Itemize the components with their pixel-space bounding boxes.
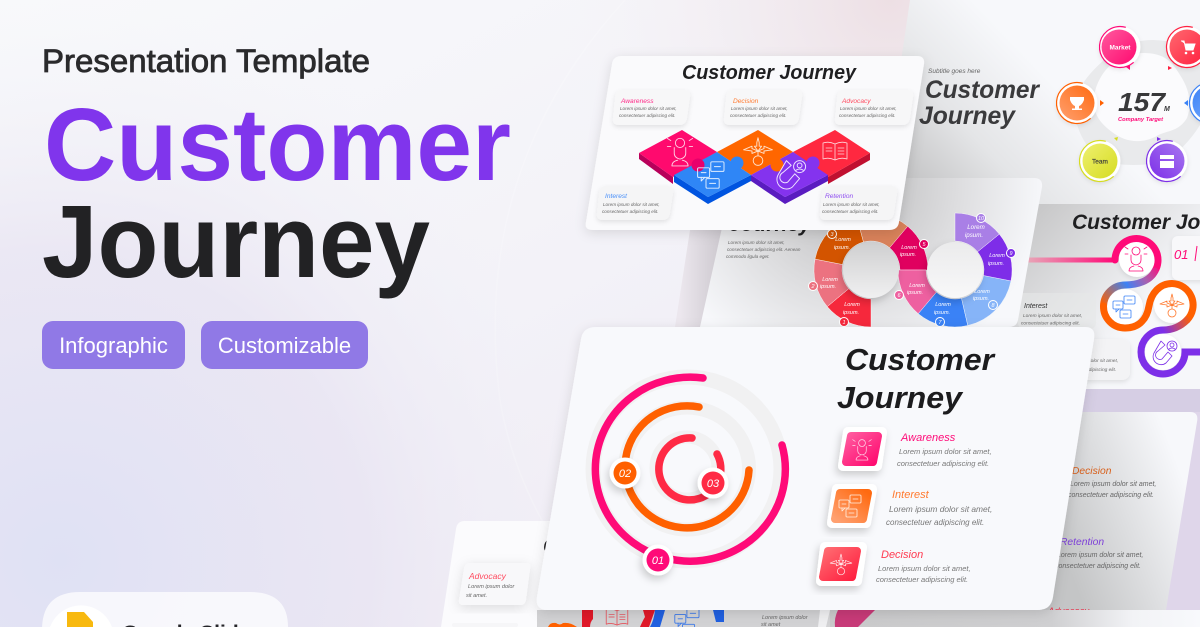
icon: chat bbox=[1113, 296, 1135, 318]
number badges bbox=[808, 214, 1016, 326]
segment labels: Lorem bbox=[974, 289, 990, 295]
node: blue bbox=[1181, 74, 1200, 132]
node: Market bbox=[1091, 18, 1149, 76]
panel: top-right slide backdrop: Journey bbox=[919, 102, 1016, 130]
marker 01 bbox=[642, 544, 674, 576]
panel: main radial slide: Journey bbox=[837, 380, 964, 415]
card: Awareness: consectetuer adipiscing elit. bbox=[619, 113, 675, 118]
card: Decision: Decision bbox=[733, 98, 759, 105]
row: Decision: Lorem ipsum dolor sit amet, bbox=[878, 564, 971, 573]
card: lower bbox=[1040, 339, 1130, 380]
gear: red bbox=[582, 609, 655, 627]
card: Advocacy: consectetuer adipiscing elit. bbox=[839, 113, 895, 118]
donut holes bbox=[843, 242, 983, 298]
pink shape bbox=[835, 610, 875, 627]
card: Awareness: Lorem ipsum dolor sit amet, bbox=[620, 106, 677, 111]
heading: Customer Journey: Customer bbox=[845, 342, 996, 377]
node: wallet bbox=[1138, 132, 1196, 190]
segment labels: ipsum. bbox=[834, 245, 850, 251]
icon: head bbox=[1125, 247, 1147, 271]
tag: Customizable bbox=[201, 321, 368, 369]
backdrop behind donut slide bbox=[675, 230, 730, 327]
node: Team: Team bbox=[1092, 158, 1108, 166]
ring 01 arc bbox=[595, 377, 785, 561]
card: Retention: Retention bbox=[825, 193, 854, 200]
ring diagram: company target bbox=[1048, 18, 1200, 190]
card: Decision: Lorem ipsum dolor sit amet, bbox=[731, 106, 788, 111]
node: cart bbox=[1158, 18, 1200, 76]
icon: slides file bbox=[67, 612, 93, 627]
infinity donut chart bbox=[808, 213, 1016, 327]
metric: 157M: 157 bbox=[1118, 87, 1167, 117]
panel: snake timeline slide bbox=[1000, 204, 1200, 412]
number badges: 6 bbox=[897, 293, 901, 299]
panel: right list slide bbox=[1040, 412, 1200, 617]
card: Retention: Lorem ipsum dolor sit amet, bbox=[823, 202, 880, 207]
node: Market: Market bbox=[1110, 44, 1131, 52]
line into snake bbox=[1026, 258, 1115, 262]
card: 01 bbox=[1172, 236, 1200, 280]
node: trophy bbox=[1048, 74, 1106, 132]
number badges: 1 bbox=[842, 320, 846, 326]
subtitle: Subtitle goes here bbox=[928, 68, 981, 75]
icon: magnet bbox=[1153, 341, 1177, 365]
tag: Infographic: Infographic bbox=[59, 333, 168, 358]
number badges: 10 bbox=[978, 216, 985, 222]
piece: Decision bbox=[717, 130, 793, 175]
row: Interest: consectetuer adipiscing elit. bbox=[886, 518, 984, 527]
heading: Customer Journey: Customer bbox=[925, 76, 1040, 104]
number badges: 3 bbox=[830, 232, 834, 238]
panel: right list slide: Decision bbox=[1072, 466, 1112, 477]
heading fragment: Journey bbox=[729, 213, 812, 236]
segment labels: Lorem bbox=[909, 283, 925, 289]
panel: donut slide: commodo ligula eget. bbox=[726, 254, 770, 259]
segment 7 bbox=[918, 292, 968, 327]
card: Advocacy: Advocacy bbox=[468, 571, 507, 581]
title block bbox=[42, 43, 511, 299]
piece: Retention bbox=[751, 152, 828, 204]
radial progress chart bbox=[593, 377, 785, 576]
segment labels: ipsum. bbox=[934, 310, 950, 316]
piece: Interest bbox=[674, 152, 751, 204]
tag: Infographic bbox=[42, 321, 185, 369]
marker 02: 02 bbox=[619, 468, 631, 480]
segment labels: Lorem bbox=[844, 302, 860, 308]
segment labels: ipsum. bbox=[820, 284, 836, 290]
segment 5 bbox=[890, 226, 928, 270]
card: Interest: Lorem ipsum dolor sit amet, bbox=[1023, 313, 1082, 319]
icon: arrows bbox=[1160, 294, 1184, 317]
panel: right list slide: consectetuer adipiscing elit. bbox=[1068, 492, 1154, 499]
card: Advocacy: sit amet. bbox=[466, 593, 487, 599]
icon discs bbox=[1107, 241, 1190, 370]
segment labels: Lorem bbox=[835, 237, 851, 243]
row: Awareness: Lorem ipsum dolor sit amet, bbox=[899, 447, 992, 456]
panel: bottom-left slide: C bbox=[543, 535, 559, 558]
panel: donut slide: consectetuer adipiscing elit. Aenean bbox=[727, 247, 801, 252]
number badges: 2 bbox=[810, 284, 815, 290]
number badges: 8 bbox=[991, 303, 995, 309]
card: Advocacy: Lorem ipsum dolor sit amet, bbox=[840, 106, 897, 111]
panel: main radial slide bbox=[537, 327, 1094, 610]
row: Interest bbox=[832, 489, 992, 527]
row: Awareness: consectetuer adipiscing elit. bbox=[897, 459, 989, 468]
piece: Advocacy bbox=[793, 130, 870, 184]
badge: Google Slides bbox=[42, 592, 288, 627]
segment labels: ipsum. bbox=[907, 290, 923, 296]
card: Decision: consectetuer adipiscing elit. bbox=[730, 113, 786, 118]
card: Interest: consectetuer adipiscing elit. bbox=[1021, 320, 1080, 326]
card: Awareness: Awareness bbox=[620, 98, 654, 105]
segment labels: Lorem bbox=[822, 277, 838, 283]
icon tile bbox=[821, 547, 862, 581]
segment labels: ipsum. bbox=[988, 261, 1004, 267]
heading: Customer Journey bbox=[682, 62, 857, 84]
marker 03 bbox=[698, 468, 728, 498]
panel: donut slide bbox=[700, 178, 1042, 327]
panel: right list slide: consectetuer adipiscing elit. bbox=[1055, 563, 1141, 570]
segment labels: Lorem bbox=[967, 224, 985, 231]
panel: right list slide: Advocacy bbox=[1047, 606, 1090, 617]
marker 03: 03 bbox=[707, 478, 720, 490]
segment 10 bbox=[955, 213, 999, 252]
puzzle graphic bbox=[639, 130, 870, 204]
card: Advocacy: Lorem ipsum dolor bbox=[468, 584, 515, 590]
card: Interest: Interest bbox=[1024, 303, 1048, 310]
panel: right list slide: Lorem ipsum dolor sit amet, bbox=[1070, 481, 1156, 488]
card: Interest: Interest bbox=[605, 193, 628, 200]
row: Interest: Lorem ipsum dolor sit amet, bbox=[889, 504, 992, 514]
panel: right list slide: Retention bbox=[1060, 537, 1104, 548]
panel: top-right slide backdrop bbox=[880, 0, 1200, 204]
card: Advocacy bbox=[459, 563, 530, 605]
segment labels bbox=[820, 224, 1005, 316]
panel: puzzle slide bbox=[586, 56, 924, 230]
eyebrow heading: Presentation Template bbox=[42, 43, 370, 79]
card: Interest bbox=[597, 186, 673, 220]
segment 1 bbox=[827, 289, 871, 327]
pointer arrows bbox=[1100, 65, 1188, 141]
body text: Lorem ipsum dolor sit amet, bbox=[728, 240, 785, 245]
ring tracks bbox=[593, 377, 781, 561]
segment 4 bbox=[856, 213, 908, 248]
segment labels: Lorem bbox=[901, 245, 917, 251]
segment labels: Lorem bbox=[935, 302, 951, 308]
metric: 157M: M bbox=[1164, 106, 1170, 113]
ring 03 arc bbox=[659, 438, 721, 500]
metric: 157M bbox=[1118, 87, 1170, 123]
segment 2 bbox=[814, 259, 849, 307]
title word: Customer: Customer bbox=[44, 87, 511, 202]
tag: Customizable: Customizable bbox=[218, 333, 351, 358]
marker 01: 01 bbox=[652, 555, 664, 567]
number badges: 5 bbox=[922, 242, 926, 248]
gear: orange bbox=[548, 623, 577, 627]
number badges: 7 bbox=[938, 320, 942, 326]
segment labels: ipsum. bbox=[973, 296, 989, 302]
row: Awareness: Awareness bbox=[900, 432, 956, 444]
card: Decision bbox=[724, 90, 802, 125]
ring 02 arc bbox=[625, 406, 749, 528]
bottom strip slide bbox=[537, 609, 1200, 627]
card: Advocacy bbox=[835, 90, 913, 125]
white divider slide bbox=[818, 610, 830, 627]
gear: blue bbox=[650, 609, 724, 627]
card: lower: adipiscing elit. bbox=[1086, 367, 1116, 373]
card: Advocacy: Advocacy bbox=[841, 98, 871, 105]
row: Interest: Interest bbox=[892, 489, 930, 501]
title word: Journey: Journey bbox=[42, 184, 430, 299]
icon tile bbox=[832, 489, 872, 523]
segment 3 bbox=[815, 215, 864, 264]
connecting blob bbox=[1076, 40, 1200, 165]
metric: 157M: Company Target bbox=[1118, 117, 1164, 123]
card: Retention bbox=[820, 186, 897, 220]
segment labels: Lorem bbox=[989, 253, 1005, 259]
snake ribbon bbox=[1103, 239, 1200, 374]
segment 6 bbox=[898, 270, 936, 314]
text fragment: Lorem ipsum dolor bbox=[762, 615, 809, 621]
row: Decision bbox=[821, 547, 971, 584]
row: Decision: consectetuer adipiscing elit. bbox=[876, 575, 968, 584]
card: Awareness bbox=[613, 90, 690, 125]
node: Team bbox=[1071, 132, 1129, 190]
marker 02 bbox=[610, 458, 640, 488]
segment labels: ipsum. bbox=[900, 252, 916, 258]
card: 01: 01 bbox=[1174, 247, 1188, 262]
segment 9 bbox=[978, 234, 1012, 281]
row: Awareness bbox=[843, 432, 992, 468]
number badges: 9 bbox=[1009, 251, 1013, 257]
card: Interest: consectetuer adipiscing elit. bbox=[602, 209, 658, 214]
card: Retention: consectetuer adipiscing elit. bbox=[822, 209, 878, 214]
segment labels: ipsum. bbox=[965, 232, 983, 239]
card: Interest: Lorem ipsum dolor sit amet, bbox=[603, 202, 660, 207]
panel: bottom-left slide bbox=[441, 521, 600, 627]
card: Interest bbox=[1016, 293, 1096, 329]
card: lower: dolor sit amet, bbox=[1088, 358, 1118, 364]
icon tile bbox=[843, 432, 882, 466]
panel: right list slide: Lorem ipsum dolor sit amet, bbox=[1057, 552, 1143, 559]
segment labels: ipsum. bbox=[843, 310, 859, 316]
piece: Awareness bbox=[639, 130, 717, 184]
segment 8 bbox=[962, 276, 1011, 326]
row: Decision: Decision bbox=[881, 549, 923, 561]
